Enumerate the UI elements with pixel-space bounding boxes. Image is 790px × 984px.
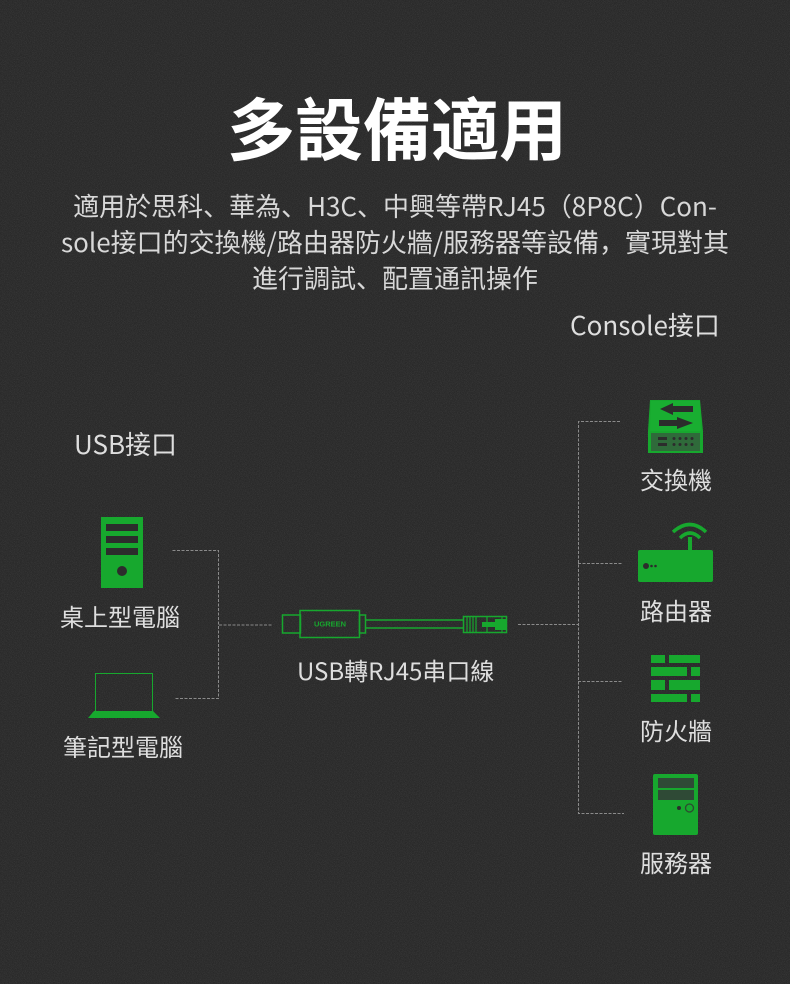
label: router: 路由器 [640, 592, 712, 627]
description text: 進行調試、配置通訊操作 [252, 259, 538, 296]
description text: sole接口的交換機/路由器防火牆/服務器等設備，實現對其 [61, 223, 729, 260]
icon: usb to rj45 cable: UGREEN [314, 620, 346, 628]
label: server: 服務器 [640, 844, 712, 879]
label: firewall: 防火牆 [640, 712, 712, 747]
description text: 適用於思科、華為、H3C、中興等帶RJ45（8P8C）Con- [73, 187, 717, 224]
label: usb port: USB接口 [74, 425, 177, 462]
label: cable: USB轉RJ45串口線 [297, 652, 494, 687]
title: 多設備適用 [227, 76, 567, 175]
description text [61, 187, 729, 296]
label: laptop: 筆記型電腦 [63, 728, 183, 763]
label: switch: 交換機 [640, 461, 712, 496]
label: console port: Console接口 [570, 306, 720, 343]
label: desktop: 桌上型電腦 [60, 598, 180, 633]
